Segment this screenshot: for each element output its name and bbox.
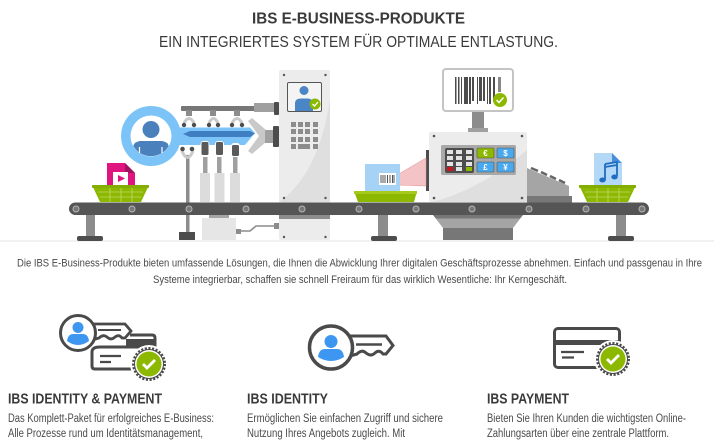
conveyor legs xyxy=(77,215,634,241)
conveyor illustration xyxy=(69,69,649,241)
pistons xyxy=(200,141,240,202)
payment panel: ¥ xyxy=(503,163,508,172)
right basket xyxy=(579,185,636,202)
payment panel: $ xyxy=(503,149,508,158)
right clamp xyxy=(248,118,279,154)
body text: Nutzung Ihres Angebots zugleich. Mit xyxy=(247,428,406,440)
scanned box xyxy=(354,164,417,202)
intro text: Systeme integrierbar, schaffen sie schnell Freiraum für das wirklich Wesentliche: Ihr Kerngeschäft. xyxy=(153,274,567,286)
body text: Alle Prozesse rund um Identitätsmanagement, xyxy=(8,428,203,440)
key with person xyxy=(121,106,255,166)
body text xyxy=(487,413,686,440)
machine: identity cabinet xyxy=(279,70,330,240)
panel: identity xyxy=(247,326,443,440)
conveyor belt xyxy=(69,202,649,215)
heading: IBS IDENTITY xyxy=(247,390,328,408)
icon: card and badge xyxy=(554,328,632,378)
title xyxy=(159,10,558,51)
music file xyxy=(594,153,622,185)
title: EIN INTEGRIERTES SYSTEM FÜR OPTIMALE ENTLASTUNG. xyxy=(159,33,558,51)
lower box and cable xyxy=(202,215,279,240)
top arm with grippers xyxy=(181,102,279,127)
intro text xyxy=(17,258,702,286)
panel: payment xyxy=(487,328,686,440)
pink media file xyxy=(107,163,135,185)
keypad xyxy=(291,122,318,149)
barcode xyxy=(455,77,501,104)
payment panel: £ xyxy=(483,163,488,172)
body text xyxy=(247,413,443,440)
payment panel: € xyxy=(483,149,488,158)
title: IBS E-BUSINESS-PRODUKTE xyxy=(252,10,465,28)
plunger pole xyxy=(179,147,195,240)
scanner base funnel xyxy=(433,215,523,240)
heading: IBS PAYMENT xyxy=(487,390,569,408)
body text: Das Komplett-Paket für erfolgreiches E-Business: xyxy=(8,413,214,425)
body text: Zahlungsarten über eine zentrale Plattform. xyxy=(487,428,669,440)
icon: key, card and badge xyxy=(60,316,168,383)
icon: key xyxy=(310,326,393,369)
scanner monitor xyxy=(443,69,513,133)
left basket xyxy=(92,185,149,202)
body text: Ermöglichen Sie einfachen Zugriff und sichere xyxy=(247,413,443,425)
panel: identity and payment xyxy=(8,316,214,440)
scanner body xyxy=(426,132,572,203)
payment panel xyxy=(441,145,516,175)
scan beam xyxy=(397,158,426,186)
heading: IBS IDENTITY & PAYMENT xyxy=(8,390,162,408)
body text xyxy=(8,413,214,440)
screen with person xyxy=(288,82,322,112)
